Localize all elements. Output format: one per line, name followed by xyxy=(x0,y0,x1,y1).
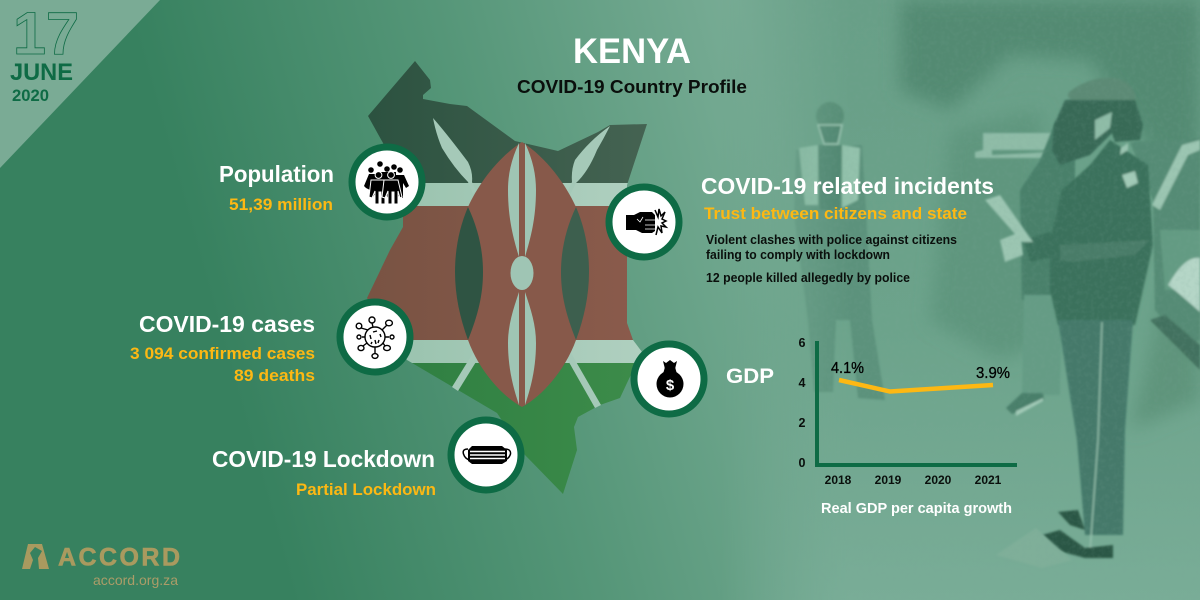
logo url: accord.org.za xyxy=(93,572,178,588)
chart caption: Real GDP per capita growth xyxy=(821,500,1012,517)
incidents block xyxy=(609,173,994,285)
flag bands xyxy=(367,61,647,494)
chart axes xyxy=(817,341,1017,465)
x axis labels: 2019 xyxy=(875,473,902,487)
date corner xyxy=(0,0,160,168)
population value: 51,39 million xyxy=(229,195,333,214)
x axis labels xyxy=(825,473,1002,487)
ground stone xyxy=(1003,530,1066,556)
logo wordmark: ACCORD xyxy=(58,544,180,572)
incidents text: failing to comply with lockdown xyxy=(706,248,890,262)
incidents subheading: Trust between citizens and state xyxy=(704,204,967,223)
value 2021: 3.9% xyxy=(976,365,1010,382)
lockdown value: Partial Lockdown xyxy=(296,480,436,499)
x axis labels: 2021 xyxy=(975,473,1002,487)
photo grain xyxy=(1057,102,1130,552)
date year: 2020 xyxy=(12,86,49,105)
logo mark xyxy=(22,544,49,569)
y axis labels: 6 xyxy=(799,336,806,350)
Kenya map with flag xyxy=(367,61,647,494)
lockdown label: COVID-19 Lockdown xyxy=(212,446,435,472)
gdp line xyxy=(839,380,993,392)
Maasai shield xyxy=(455,142,589,407)
gdp block xyxy=(634,336,1017,517)
icon: people xyxy=(352,147,422,217)
incidents heading: COVID-19 related incidents xyxy=(701,173,994,199)
x axis labels: 2018 xyxy=(825,473,852,487)
population block xyxy=(219,147,422,217)
date day: 17 xyxy=(13,0,79,67)
confirmed cases: 3 094 confirmed cases xyxy=(130,344,315,363)
background hut xyxy=(975,133,1053,158)
gdp label: GDP xyxy=(726,365,774,388)
spears xyxy=(433,118,610,408)
icon: fist xyxy=(609,187,679,257)
subtitle: COVID-19 Country Profile xyxy=(517,76,747,97)
date triangle xyxy=(0,0,160,168)
incidents text: Violent clashes with police against citizens xyxy=(706,233,957,247)
y axis labels: 0 xyxy=(799,456,806,470)
person behind woman xyxy=(1006,120,1075,416)
covid cases label: COVID-19 cases xyxy=(139,311,315,337)
date month: JUNE xyxy=(10,59,73,86)
incidents text: 12 people killed allegedly by police xyxy=(706,271,910,285)
icon: face mask xyxy=(451,420,521,490)
covid cases block xyxy=(130,302,410,385)
y axis labels xyxy=(799,336,806,470)
man in vest xyxy=(794,102,885,400)
background photo: officers in masks xyxy=(784,0,1200,600)
x axis labels: 2020 xyxy=(925,473,952,487)
woman officer xyxy=(985,78,1153,558)
car xyxy=(1130,138,1200,370)
title: KENYA xyxy=(573,32,691,71)
icon: money bag: $ xyxy=(666,377,675,394)
population label: Population xyxy=(219,161,334,187)
icon: money bag xyxy=(634,344,704,414)
lockdown block xyxy=(212,420,521,499)
value 2018: 4.1% xyxy=(831,360,864,377)
line chart xyxy=(799,336,1017,517)
icon: virus xyxy=(340,302,410,372)
ACCORD logo xyxy=(22,544,180,588)
y axis labels: 2 xyxy=(799,416,806,430)
y axis labels: 4 xyxy=(799,376,806,390)
deaths: 89 deaths xyxy=(234,366,315,385)
